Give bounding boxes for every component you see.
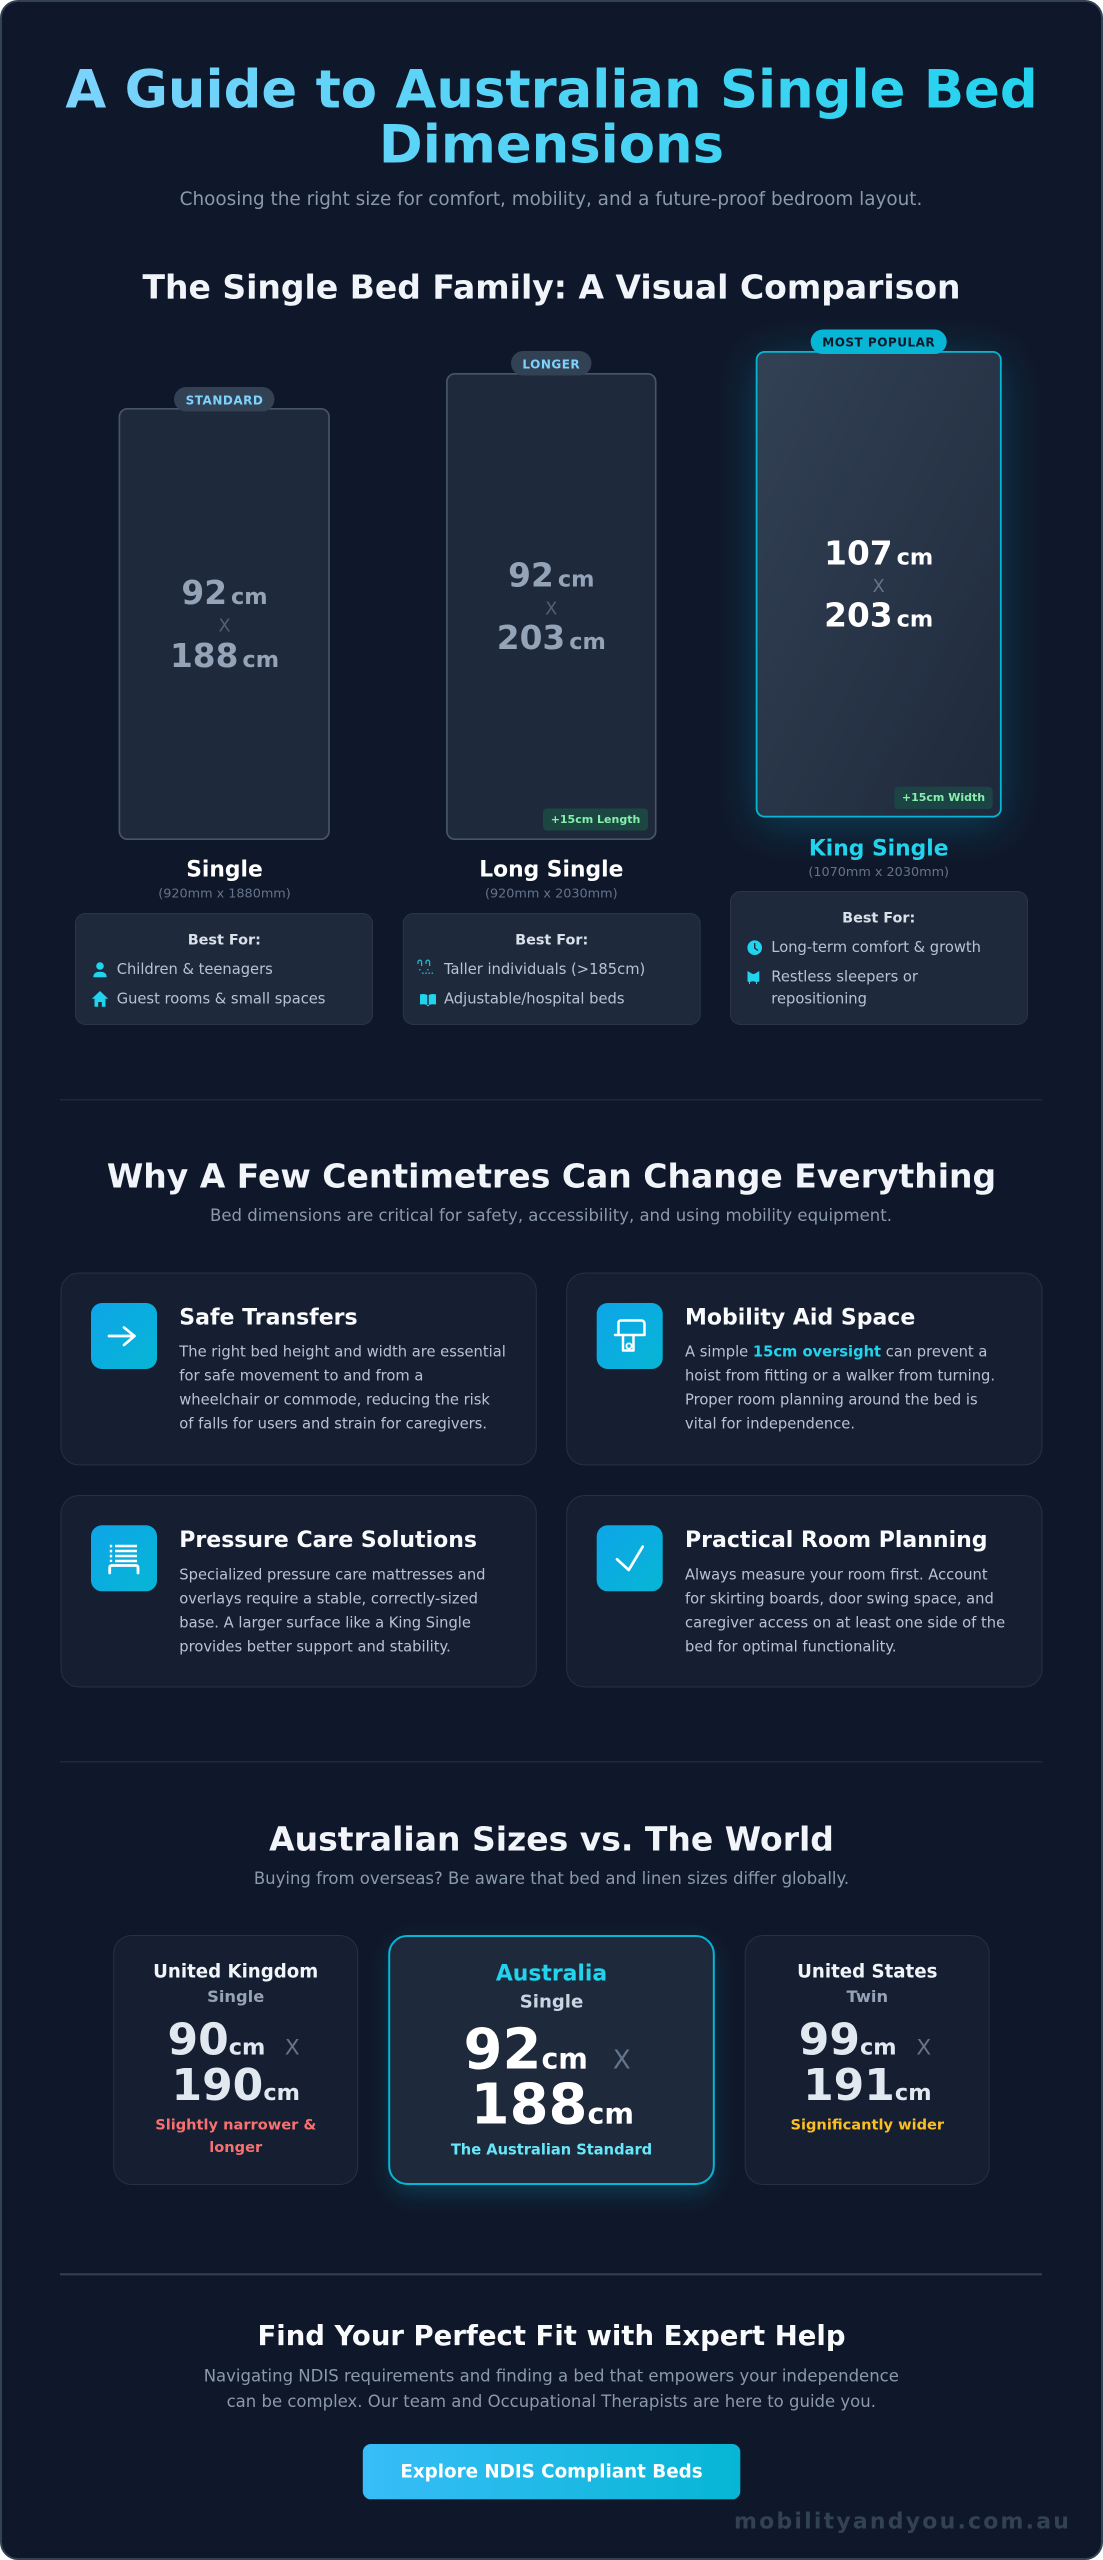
card: practical room planning	[567, 1496, 1042, 1687]
dimensions: us: X	[916, 2036, 931, 2060]
dimensions: uk: 90cm	[168, 2014, 265, 2065]
divider	[60, 2273, 1042, 2275]
note: us: Significantly wider	[790, 2116, 945, 2133]
dimensions: australia: X	[613, 2046, 631, 2076]
dimensions: single: 188cm	[170, 637, 279, 675]
dimensions: long single: 203cm	[497, 619, 606, 657]
dimensions: king single: X	[873, 577, 885, 597]
text: practical room planning: caregiver access on at least one side of the	[685, 1614, 1005, 1631]
card: australia: Single	[520, 1991, 583, 2012]
badge: most popular	[811, 330, 947, 354]
best for: single: Children & teenagers	[117, 961, 273, 978]
watermark: mobilityandyou.com.au	[734, 2509, 1071, 2534]
badge: standard: STANDARD	[186, 394, 263, 408]
text: pressure care: overlays require a stable, correctly-sized	[179, 1590, 478, 1607]
dimensions: king single: 203cm	[824, 597, 933, 635]
card: australia: Australia	[496, 1962, 607, 1987]
panel: king single bed	[730, 330, 1028, 1024]
bed: single	[119, 409, 329, 839]
heading: why: Why A Few Centimetres Can Change Everything	[107, 1157, 996, 1196]
badge: longer: LONGER	[522, 358, 580, 372]
heading: world sizes: Australian Sizes vs. The World	[269, 1820, 834, 1859]
badge: longer	[511, 351, 592, 376]
icon: restless sleeper	[748, 971, 759, 984]
dimensions: uk	[168, 2014, 300, 2111]
text: call to action: Navigating NDIS requirements and finding a bed that empowers your independence	[204, 2367, 899, 2386]
tag: plus 15cm width	[894, 787, 993, 809]
dimensions: long single	[497, 556, 606, 657]
note: uk: Slightly narrower &	[155, 2116, 316, 2133]
card: mobility aid space: Mobility Aid Space	[685, 1306, 915, 1331]
size: king single: (1070mm x 2030mm)	[808, 865, 949, 880]
dimensions: us	[799, 2014, 932, 2111]
subheading: why: Bed dimensions are critical for safety, accessibility, and using mobility equipment.	[210, 1206, 892, 1225]
best for: single: Best For:	[188, 932, 261, 948]
icon: book	[420, 994, 436, 1006]
card: pressure care: Pressure Care Solutions	[179, 1528, 477, 1553]
note: uk: longer	[209, 2139, 263, 2156]
dimensions: australia	[464, 2017, 634, 2137]
label: long single: Long Single	[479, 858, 623, 882]
text: safe transfers: for safe movement to and from a	[179, 1368, 423, 1384]
text: mobility aid space: Proper room planning around the bed is	[685, 1392, 978, 1408]
dimensions: uk: X	[285, 2036, 300, 2060]
text: mobility aid space: A simple	[685, 1344, 753, 1360]
button: explore beds	[363, 2444, 740, 2499]
card: united states: United States	[797, 1961, 937, 1982]
dimensions: australia: 92cm	[464, 2017, 588, 2082]
text: pressure care: provides better support and stability.	[179, 1638, 451, 1655]
best for: king single: Long-term comfort & growth	[771, 939, 981, 956]
text: mobility aid space: vital for independence.	[685, 1416, 855, 1432]
card: mobility aid space	[567, 1273, 1042, 1465]
panel: single bed	[76, 387, 372, 1024]
card: safe transfers	[61, 1273, 536, 1465]
text: pressure care: base. A larger surface like a King Single	[179, 1614, 471, 1631]
dimensions: single	[170, 574, 279, 675]
text: safe transfers: wheelchair or commode, reducing the risk	[179, 1392, 490, 1408]
text: practical room planning: for skirting boards, door swing space, and	[685, 1590, 994, 1607]
subtitle: Choosing the right size for comfort, mobility, and a future-proof bedroom layout.	[180, 189, 922, 210]
tag: plus 15cm length: +15cm Length	[551, 813, 640, 826]
icon: arrow	[91, 1303, 157, 1369]
text: practical room planning: bed for optimal functionality.	[685, 1638, 897, 1655]
header	[65, 60, 1038, 210]
best for: long single	[403, 914, 700, 1024]
dimensions: king single: 107cm	[824, 534, 933, 572]
button: explore beds: Explore NDIS Compliant Beds	[400, 2462, 703, 2483]
card: united kingdom: United Kingdom	[153, 1961, 318, 1982]
dimensions: king single	[824, 534, 933, 635]
label: king single: King Single	[809, 837, 949, 862]
badge: standard	[174, 387, 274, 412]
text: safe transfers: The right bed height and width are essential	[178, 1344, 506, 1360]
list text: restless sleepers: Restless sleepers or	[771, 968, 919, 985]
best for: king single: Best For:	[842, 910, 915, 926]
list text: restless sleepers: repositioning	[771, 990, 867, 1007]
tag: plus 15cm width: +15cm Width	[902, 791, 985, 804]
card: pressure care	[61, 1496, 536, 1687]
glow: australia	[392, 1944, 712, 2192]
text: call to action: can be complex. Our team and Occupational Therapists are here to guide you.	[227, 2392, 876, 2411]
card: united kingdom	[114, 1936, 358, 2184]
icon: hoist	[597, 1303, 663, 1369]
dimensions: uk: 190cm	[171, 2060, 300, 2111]
bed: long single	[447, 374, 656, 839]
card: united states	[745, 1936, 989, 2184]
best for: single	[76, 914, 372, 1024]
card: safe transfers: Safe Transfers	[179, 1306, 358, 1331]
icon: pressure mattress	[91, 1525, 157, 1591]
icon: check	[597, 1525, 663, 1591]
text: practical room planning: Always measure your room first. Account	[685, 1566, 988, 1583]
divider	[60, 1761, 1042, 1762]
tag: plus 15cm length	[543, 808, 648, 830]
title: A Guide to Australian Single Bed	[65, 60, 1038, 120]
dimensions: single: X	[218, 616, 231, 636]
text: mobility aid space: 15cm oversight can prevent a	[753, 1344, 987, 1360]
heading: call to action: Find Your Perfect Fit with Expert Help	[257, 2320, 846, 2352]
icon: clock	[747, 940, 762, 955]
card: australia	[389, 1936, 714, 2192]
title: Dimensions	[379, 114, 724, 176]
label: single: Single	[186, 858, 263, 882]
text: pressure care: Specialized pressure care mattresses and	[179, 1566, 486, 1583]
size: long single: (920mm x 2030mm)	[485, 887, 618, 902]
icon: ruler	[418, 960, 433, 973]
heading: bed family: The Single Bed Family: A Visual Comparison	[142, 268, 961, 307]
card: practical room planning: Practical Room Planning	[685, 1528, 988, 1553]
dimensions: us: 99cm	[799, 2014, 897, 2065]
subheading: world sizes: Buying from overseas? Be aware that bed and linen sizes differ globally.	[254, 1869, 849, 1888]
dimensions: single: 92cm	[181, 574, 268, 612]
size: single: (920mm x 1880mm)	[158, 887, 291, 902]
card: united states: Twin	[847, 1987, 888, 2006]
best for: long single: Taller individuals (>185cm)	[443, 961, 645, 978]
icon: person	[93, 962, 107, 977]
panel: long single bed	[403, 351, 700, 1024]
note: australia: The Australian Standard	[451, 2141, 652, 2158]
icon: house	[92, 991, 108, 1007]
card: united kingdom: Single	[207, 1987, 264, 2006]
best for: long single: Best For:	[515, 932, 588, 948]
text: mobility aid space: hoist from fitting or a walker from turning.	[685, 1368, 995, 1384]
dimensions: long single: 92cm	[508, 556, 594, 594]
best for: king single	[730, 892, 1028, 1024]
divider	[60, 1099, 1042, 1100]
dimensions: long single: X	[545, 599, 557, 619]
bed: king single	[757, 352, 1001, 817]
best for: long single: Adjustable/hospital beds	[444, 990, 624, 1007]
best for: single: Guest rooms & small spaces	[117, 990, 325, 1007]
glow: king single	[757, 358, 1001, 824]
dimensions: us: 191cm	[803, 2060, 932, 2111]
dimensions: australia: 188cm	[471, 2072, 634, 2137]
text: safe transfers: of falls for users and strain for caregivers.	[179, 1416, 487, 1432]
badge: most popular: MOST POPULAR	[822, 335, 935, 349]
